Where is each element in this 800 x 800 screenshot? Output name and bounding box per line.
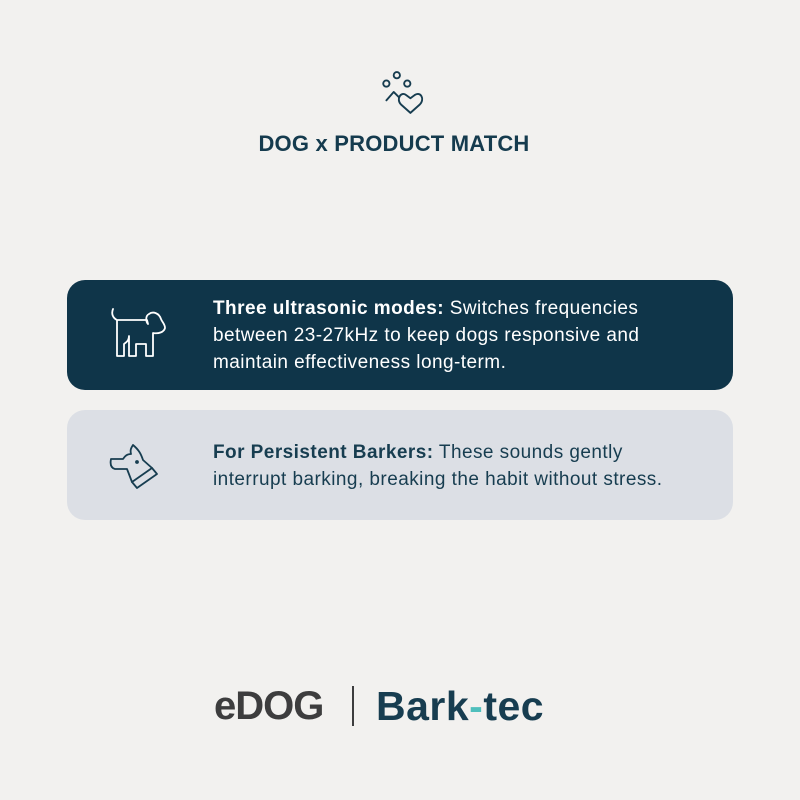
- divider: [352, 686, 354, 726]
- title: DOG x PRODUCT MATCH: [258, 131, 530, 156]
- icon: paw heart: [382, 71, 424, 114]
- panel: persistent barkers: [67, 410, 733, 520]
- text: Three ultrasonic modes: Switches frequencies: [213, 298, 638, 319]
- text: between 23-27kHz to keep dogs responsive and: [213, 325, 639, 346]
- text: [213, 442, 662, 490]
- text: maintain effectiveness long-term.: [213, 352, 506, 373]
- text: For Persistent Barkers: These sounds gently: [213, 442, 623, 463]
- text: [213, 298, 639, 373]
- panel: ultrasonic modes: [67, 280, 733, 390]
- text: interrupt barking, breaking the habit without stress.: [213, 469, 662, 490]
- logo: Bark-tec: Bark-tec: [376, 683, 544, 729]
- icon: dog head with collar: [110, 444, 158, 489]
- icon: dog: [111, 308, 166, 357]
- logo: eDOG: eDOG: [214, 684, 323, 728]
